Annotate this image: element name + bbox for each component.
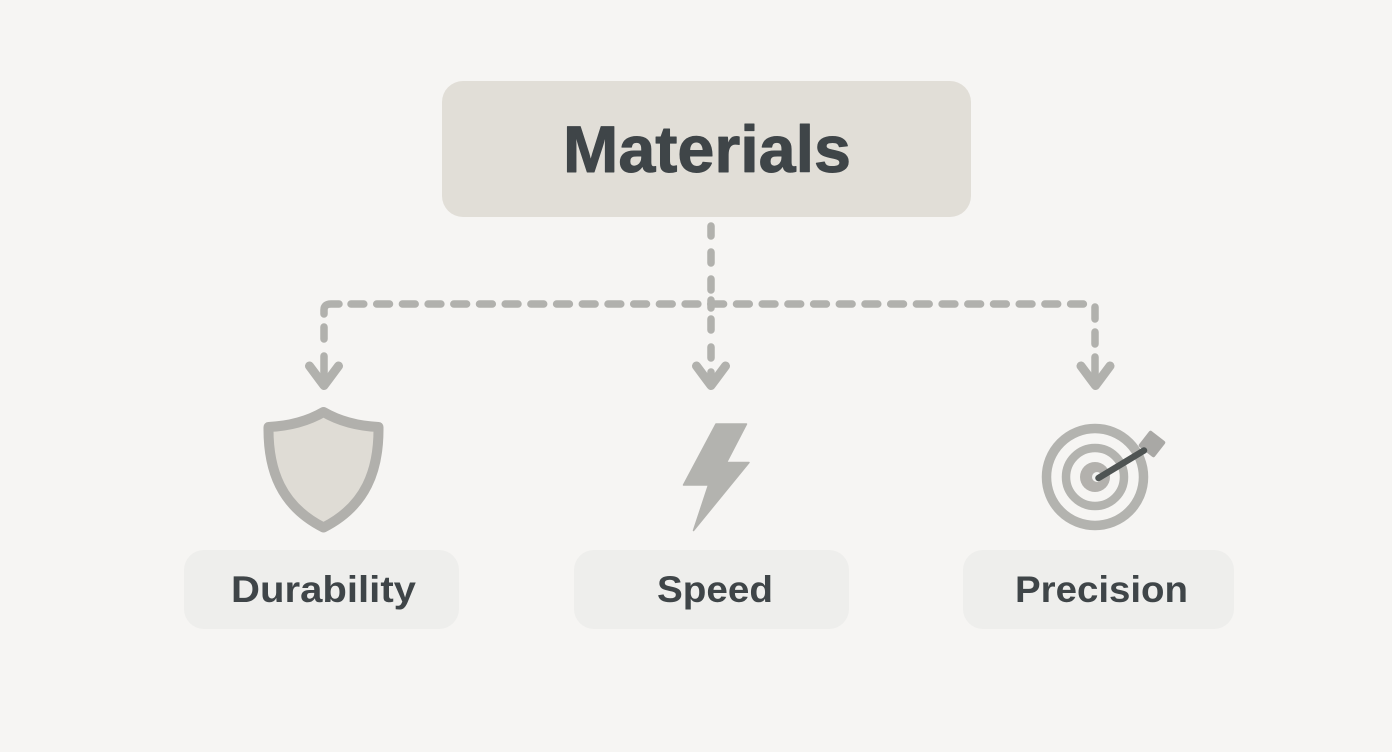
dashed connector: vertical trunk to Speed xyxy=(707,226,715,384)
title box: Materials xyxy=(442,81,971,217)
label: Speed: Speed xyxy=(657,569,773,610)
arrow head: Durability xyxy=(310,366,338,386)
label: Precision: Precision xyxy=(1015,569,1188,610)
label: Speed xyxy=(574,550,849,629)
icon: shield xyxy=(268,412,379,528)
dashed connector: horizontal branch to Durability and Precision xyxy=(324,304,1095,380)
label: Durability xyxy=(184,550,459,629)
label: Precision xyxy=(963,550,1234,629)
icon: target with dart xyxy=(1046,428,1166,526)
arrow head: Speed xyxy=(696,366,726,386)
label: Durability: Durability xyxy=(231,569,416,610)
title box: Materials: Materials xyxy=(563,112,851,186)
arrow head: Precision xyxy=(1081,366,1110,386)
icon: lightning bolt xyxy=(684,424,749,530)
